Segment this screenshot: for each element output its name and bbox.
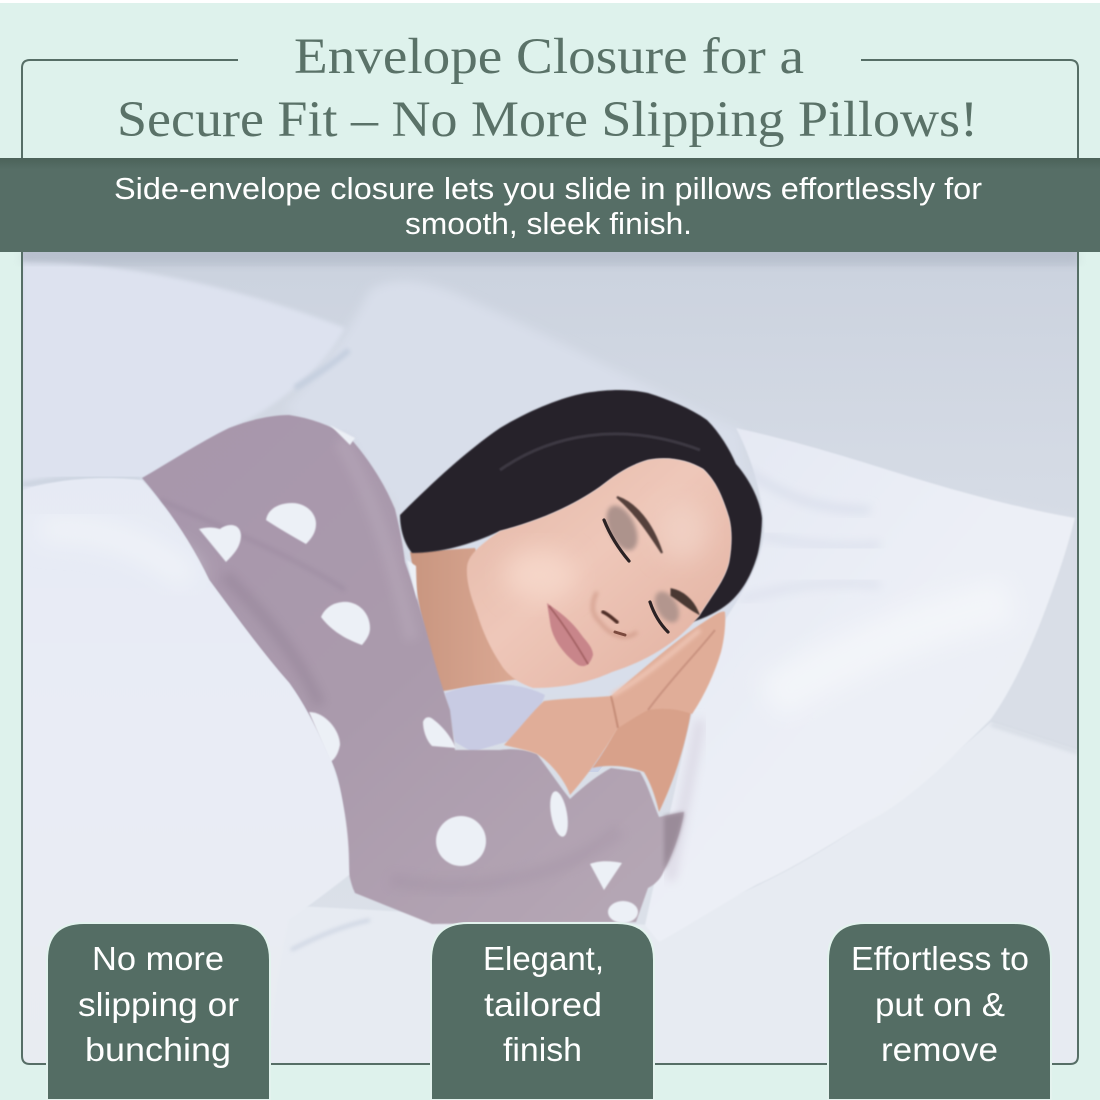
callout: effortless: remove xyxy=(881,1031,998,1068)
hands and forearms xyxy=(592,702,692,812)
bed sheet xyxy=(260,722,1078,1064)
duvet xyxy=(22,478,349,1064)
title: Secure Fit – No More Slipping Pillows! xyxy=(117,92,978,148)
callout: no more slipping: bunching xyxy=(85,1031,231,1068)
nose xyxy=(593,592,637,637)
top left pillow xyxy=(22,262,345,490)
subtitle banner: smooth, sleek finish. xyxy=(405,206,692,241)
callout: elegant finish xyxy=(431,923,654,1100)
callout: no more slipping: slipping or xyxy=(78,986,239,1023)
pajama sleeve and torso xyxy=(142,415,684,924)
back pillow xyxy=(322,284,616,378)
mattress at right xyxy=(960,500,1078,760)
gap between forearms xyxy=(589,766,602,772)
pajama polka dots xyxy=(199,425,638,923)
neck xyxy=(410,548,525,692)
subtitle banner: Side-envelope closure lets you slide in pillows effortlessly for xyxy=(114,171,982,206)
photo: woman sleeping on white pillows xyxy=(22,240,1078,1064)
callout: no more slipping: No more xyxy=(92,940,224,977)
eyes and brows xyxy=(604,520,629,561)
callout: effortless xyxy=(828,923,1051,1100)
subtitle banner xyxy=(0,158,1100,252)
eye shadow xyxy=(604,504,640,552)
callout: elegant finish: finish xyxy=(503,1031,582,1068)
title xyxy=(117,29,978,148)
face xyxy=(467,458,731,688)
front right pillow xyxy=(645,428,1075,942)
title: Envelope Closure for a xyxy=(294,29,804,85)
small pillow under chin xyxy=(445,684,545,752)
callout: effortless: Effortless to xyxy=(851,940,1029,977)
callout: effortless: put on & xyxy=(875,986,1005,1023)
lips xyxy=(547,603,593,666)
callout: elegant finish: Elegant, xyxy=(483,940,604,977)
hair xyxy=(400,390,762,622)
callout: no more slipping xyxy=(47,923,270,1100)
photo top shadow xyxy=(22,252,1078,264)
callout: elegant finish: tailored xyxy=(484,986,602,1023)
